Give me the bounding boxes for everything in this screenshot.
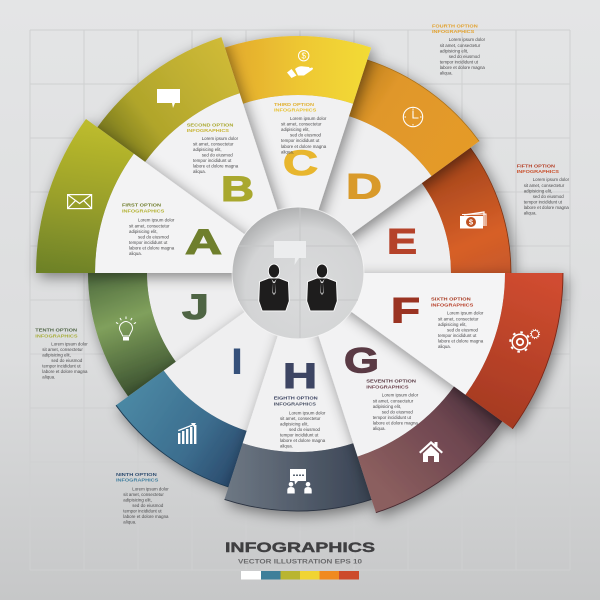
text block: third option: adipisicing elit,	[281, 127, 310, 132]
text block: seventh option: SEVENTH OPTION	[366, 379, 417, 384]
text block: seventh option: INFOGRAPHICS	[366, 384, 409, 389]
colour strip	[241, 571, 359, 580]
text block: fourth option: Lorem ipsum dolor	[449, 37, 486, 42]
text block: sixth option: sit amet, consectetur	[438, 316, 479, 321]
letter B: B	[221, 170, 254, 209]
text block: first option	[122, 203, 175, 256]
text block: fifth option: aliqua.	[524, 210, 537, 215]
text block: third option: sed do eiusmod	[290, 133, 322, 138]
text block: second option: aliqua.	[193, 169, 206, 174]
panel: segment E	[298, 148, 511, 273]
text block: second option: labore et dolore magna	[193, 164, 239, 169]
icon: speech bubble	[157, 89, 180, 108]
icon: money stack	[460, 212, 486, 228]
text block: tenth option: labore et dolore magna	[42, 369, 88, 374]
text block: second option	[187, 122, 239, 174]
footer title: INFOGRAPHICS	[225, 539, 375, 555]
text block: third option: tempor incididunt ut	[281, 138, 320, 143]
text block: ninth option: aliqua.	[123, 520, 136, 525]
text block: first option: sit amet, consectetur	[129, 223, 170, 228]
text block: tenth option: sed do eiusmod	[51, 358, 83, 363]
text block: seventh option: sed do eiusmod	[382, 409, 413, 414]
text block: eighth option	[274, 396, 326, 449]
text block: fourth option: tempor incididunt ut	[440, 59, 479, 64]
letter G: G	[344, 342, 379, 380]
text block: fourth option: FOURTH OPTION	[432, 23, 478, 28]
text block: seventh option: sit amet, consectetur	[373, 398, 414, 403]
icon: growth chart	[178, 423, 196, 444]
text block: first option: sed do eiusmod	[138, 234, 170, 239]
text block: seventh option: labore et dolore magna	[373, 421, 418, 426]
icon: hand with coin: $	[301, 52, 306, 61]
text block: fifth option: sit amet, consectetur	[524, 183, 565, 188]
icon: gears	[510, 329, 540, 352]
text block: eighth option: sit amet, consectetur	[280, 416, 321, 421]
panel: segment G	[298, 273, 502, 513]
text block: third option: labore et dolore magna	[281, 144, 327, 149]
text block: second option: INFOGRAPHICS	[187, 128, 229, 133]
text block: sixth option: aliqua.	[438, 344, 451, 349]
text block: third option: THIRD OPTION	[274, 102, 315, 107]
text block: seventh option: adipisicing elit,	[373, 404, 401, 409]
panel: segment F	[298, 273, 563, 429]
icon: left businessman	[259, 264, 289, 310]
text block: sixth option: INFOGRAPHICS	[431, 302, 473, 307]
text block: sixth option: SIXTH OPTION	[431, 297, 471, 302]
text block: ninth option: adipisicing elit,	[123, 497, 152, 502]
panel: segment H	[224, 273, 372, 511]
icon: envelope	[68, 195, 92, 209]
icon: center speech bubble	[274, 241, 306, 265]
icon: hand with coin	[287, 50, 313, 78]
text block: fifth option: FIFTH OPTION	[517, 163, 556, 168]
text block: second option: sit amet, consectetur	[193, 142, 234, 147]
text block: second option: Lorem ipsum dolor	[202, 136, 239, 141]
text block: ninth option	[116, 472, 169, 525]
text block: fifth option: labore et dolore magna	[524, 205, 569, 210]
text block: second option: SECOND OPTION	[187, 122, 234, 127]
text block: seventh option	[366, 379, 419, 431]
text block: tenth option: adipisicing elit,	[42, 352, 71, 357]
text block: ninth option: labore et dolore magna	[123, 514, 169, 519]
text block: first option: tempor incididunt ut	[129, 240, 168, 245]
panel: segment A	[36, 119, 298, 273]
letter D: D	[346, 168, 382, 206]
icon: discussion people	[287, 469, 312, 494]
text block: third option: sit amet, consectetur	[281, 122, 322, 127]
text block: second option: adipisicing elit,	[193, 147, 222, 152]
text block: eighth option: adipisicing elit,	[280, 421, 309, 426]
letter H: H	[283, 357, 317, 396]
text block: seventh option: aliqua.	[373, 426, 386, 431]
text block: fourth option: INFOGRAPHICS	[432, 29, 474, 34]
text block: eighth option: tempor incididunt ut	[280, 433, 319, 438]
letter C: C	[283, 144, 318, 183]
text block: third option	[274, 102, 327, 154]
text block: sixth option	[431, 297, 484, 349]
text block: fifth option: sed do eiusmod	[533, 194, 564, 199]
center circle	[232, 206, 364, 340]
text block: seventh option: tempor incididunt ut	[373, 415, 412, 420]
text block: fifth option	[517, 163, 570, 216]
icon: clock	[403, 107, 423, 127]
text block: fourth option	[432, 23, 486, 75]
text block: eighth option: INFOGRAPHICS	[274, 401, 316, 406]
text block: eighth option: Lorem ipsum dolor	[289, 410, 326, 415]
text block: fourth option: aliqua.	[440, 70, 453, 75]
panel: segment B	[97, 37, 298, 273]
panel: segment D	[298, 60, 479, 273]
text block: second option: sed do eiusmod	[202, 153, 233, 158]
text block: sixth option: sed do eiusmod	[447, 327, 479, 332]
text block: fourth option: sit amet, consectetur	[440, 43, 481, 48]
text block: first option: labore et dolore magna	[129, 245, 175, 250]
text block: fourth option: adipisicing elit,	[440, 48, 468, 53]
text block: ninth option: Lorem ipsum dolor	[132, 486, 169, 491]
text block: third option: INFOGRAPHICS	[274, 108, 316, 113]
text block: eighth option: aliqua.	[280, 444, 293, 449]
text block: eighth option: sed do eiusmod	[289, 427, 321, 432]
text block: first option: adipisicing elit,	[129, 229, 158, 234]
text block: third option: aliqua.	[281, 149, 294, 154]
text block: first option: FIRST OPTION	[122, 203, 162, 208]
icon: right businessman	[307, 264, 337, 310]
text block: second option: tempor incididunt ut	[193, 158, 232, 163]
icon: light bulb	[116, 316, 136, 340]
text block: tenth option: INFOGRAPHICS	[35, 333, 78, 338]
footer subtitle: VECTOR ILLUSTRATION EPS 10	[238, 560, 363, 566]
text block: sixth option: adipisicing elit,	[438, 322, 467, 327]
text block: ninth option: NINTH OPTION	[116, 472, 157, 477]
text block: ninth option: tempor incididunt ut	[123, 508, 162, 514]
text block: ninth option: INFOGRAPHICS	[116, 478, 158, 483]
text block: fourth option: sed do eiusmod	[449, 54, 480, 59]
text block: ninth option: sit amet, consectetur	[123, 492, 164, 497]
text block: tenth option: tempor incididunt ut	[42, 364, 81, 369]
text block: fifth option: Lorem ipsum dolor	[533, 177, 570, 182]
text block: tenth option: sit amet, consectetur	[42, 347, 83, 352]
text block: fifth option: tempor incididunt ut	[524, 199, 563, 204]
text block: sixth option: tempor incididunt ut	[438, 333, 477, 338]
panel: segment C	[225, 36, 371, 273]
letter I: I	[232, 342, 242, 382]
text block: fourth option: labore et dolore magna	[440, 65, 485, 70]
letter E: E	[387, 222, 417, 262]
text block: tenth option: aliqua.	[42, 375, 55, 380]
icon: money stack: $	[469, 218, 474, 227]
text block: fifth option: adipisicing elit,	[524, 188, 552, 193]
text block: eighth option: EIGHTH OPTION	[274, 396, 318, 401]
text block: sixth option: Lorem ipsum dolor	[447, 311, 484, 316]
text block: tenth option: Lorem ipsum dolor	[51, 341, 88, 346]
text block: third option: Lorem ipsum dolor	[290, 116, 327, 121]
text block: tenth option: TENTH OPTION	[35, 328, 78, 333]
letter A: A	[185, 223, 222, 262]
panel: segment J	[88, 273, 298, 396]
text block: fifth option: INFOGRAPHICS	[517, 169, 559, 174]
text block: first option: Lorem ipsum dolor	[138, 218, 175, 223]
text block: tenth option	[35, 328, 88, 380]
text block: eighth option: labore et dolore magna	[280, 438, 326, 443]
letter F: F	[391, 292, 420, 330]
panel: segment I	[116, 273, 298, 487]
text block: seventh option: Lorem ipsum dolor	[382, 393, 419, 398]
text block: first option: aliqua.	[129, 251, 142, 256]
text block: first option: INFOGRAPHICS	[122, 208, 164, 213]
text block: sixth option: labore et dolore magna	[438, 339, 484, 344]
letter J: J	[182, 288, 209, 327]
text block: ninth option: sed do eiusmod	[132, 503, 164, 508]
icon: house	[419, 441, 443, 462]
